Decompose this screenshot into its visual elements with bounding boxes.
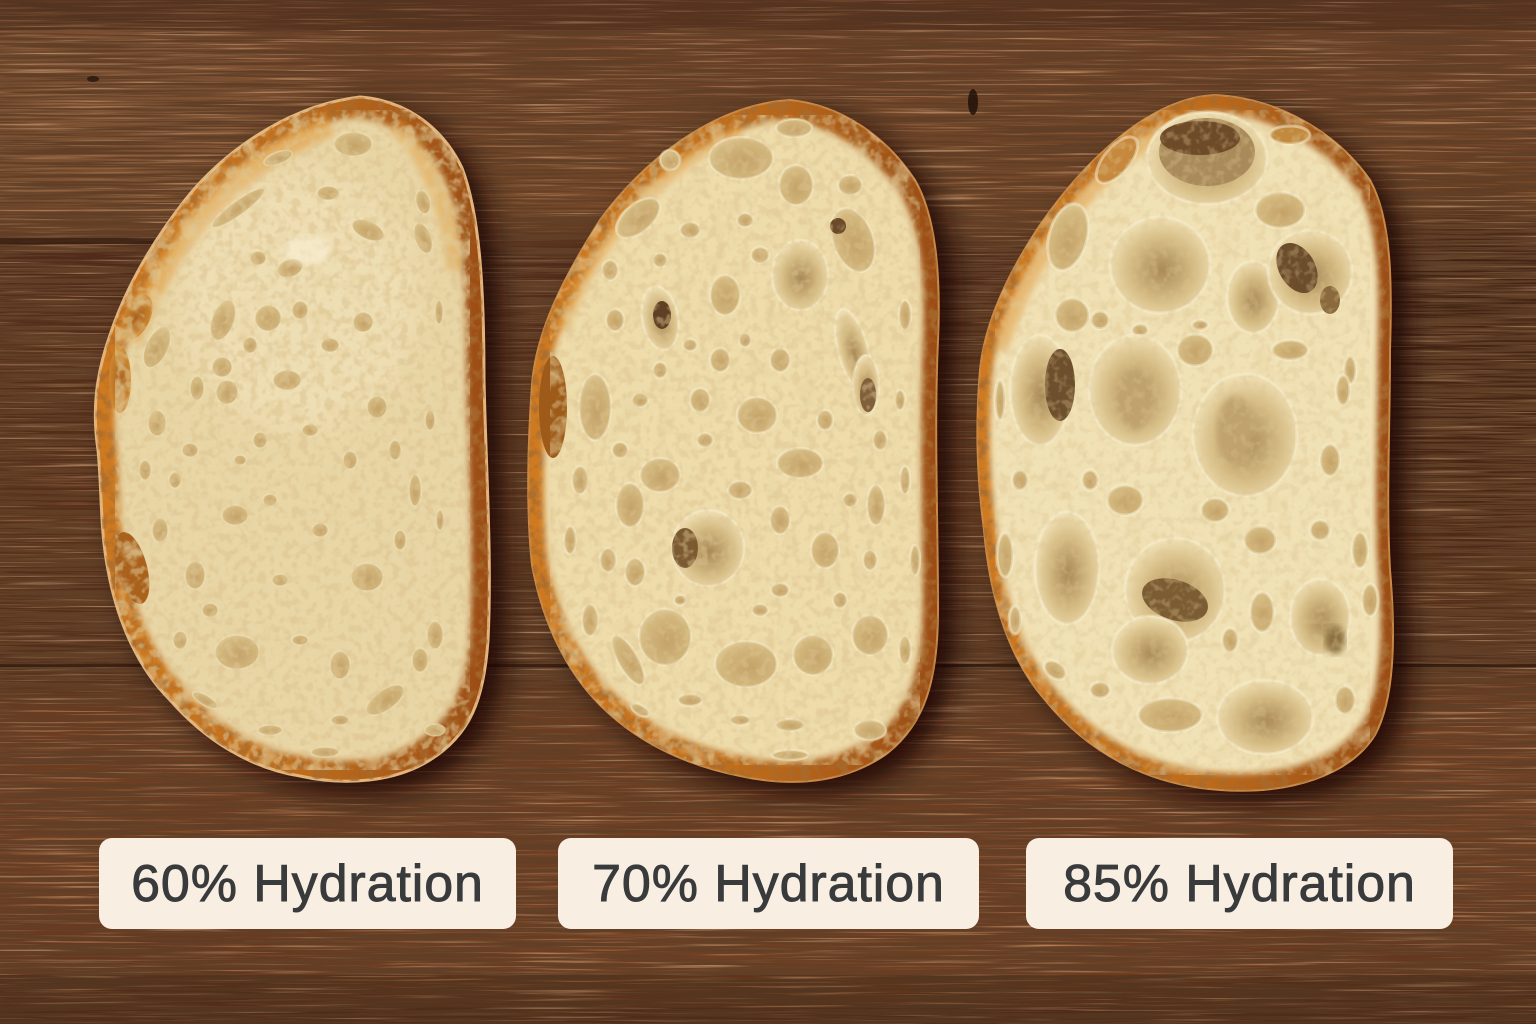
bread slice: 85% hydration: [970, 90, 1409, 803]
label: 85% Hydration: [1026, 838, 1453, 929]
label: 85% Hydration: 85% Hydration: [1063, 855, 1416, 913]
label: 70% Hydration: 70% Hydration: [592, 855, 945, 913]
label: 60% Hydration: 60% Hydration: [131, 855, 484, 913]
label: 60% Hydration: [99, 838, 516, 929]
bread slice: 60% hydration: [90, 90, 505, 793]
bread slice: 70% hydration: [520, 90, 955, 794]
label: 70% Hydration: [558, 838, 979, 929]
